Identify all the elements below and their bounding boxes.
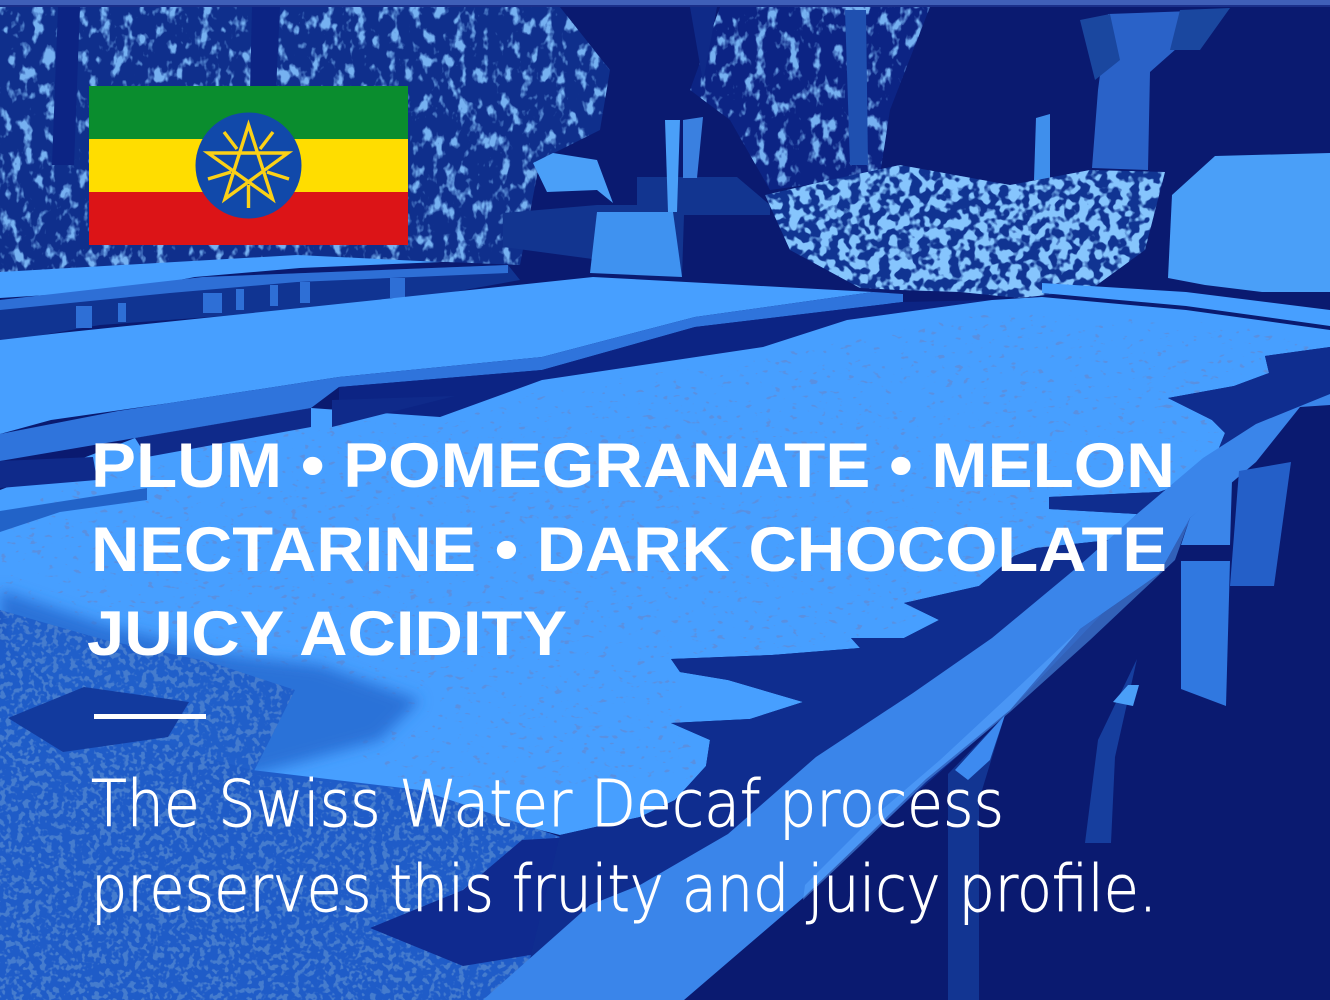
photo: far right small bed [1042, 283, 1330, 326]
photo: middle bed rail [0, 292, 903, 461]
body text [91, 768, 1157, 927]
photo: main right bed [0, 297, 1330, 835]
photo: covered cloth left [533, 153, 613, 203]
photo: dark trunk centre [690, 7, 717, 82]
flag emblem disc [196, 112, 302, 218]
photo: drying bed upper left [0, 255, 520, 342]
photo: tree trunk right [1080, 8, 1230, 170]
photo: diagonal rail [483, 394, 1330, 1000]
photo: far right post [1230, 462, 1291, 586]
photo: dark patch beside gravel [370, 832, 660, 966]
divider rule [94, 714, 206, 719]
photo: white box [590, 212, 682, 277]
photo: stacked steps behind bed [503, 177, 770, 277]
heading: flavour notes: PLUM • POMEGRANATE • MELON [91, 431, 1175, 501]
flag emblem star [208, 125, 289, 208]
photo: small lit patch [1113, 685, 1139, 706]
photo: tree beside post [683, 117, 703, 178]
photo: bush [765, 165, 1165, 298]
photo: gravel area lower left [0, 600, 570, 1000]
photo: right post [1181, 480, 1232, 706]
photo: short post [1034, 114, 1050, 180]
photo: bed specks [0, 314, 1308, 789]
photo: leg under rail [948, 715, 1005, 1000]
photo: blurred shadow stripes [0, 590, 420, 775]
photo: middle bed [0, 277, 873, 434]
photo: rail shadow bands left [0, 396, 455, 488]
photo: wedge shadow between beds [339, 300, 992, 417]
body text: The Swiss Water Decaf process [91, 768, 1004, 842]
top strip [0, 0, 1330, 7]
photo: mid stripe left [0, 488, 147, 532]
photo: forest foliage centre [690, 7, 935, 197]
photo: thin post centre [845, 10, 868, 165]
photo: tall white post [665, 120, 680, 212]
body text: preserves this fruity and juicy profile. [91, 853, 1157, 927]
flag of Ethiopia [89, 86, 408, 245]
heading: flavour notes: NECTARINE • DARK CHOCOLATE [91, 515, 1167, 585]
heading: flavour notes: JUICY ACIDITY [87, 599, 567, 669]
heading: flavour notes [87, 431, 1175, 669]
photo: rail lit edge [803, 518, 1190, 900]
photo: forest foliage left [0, 7, 620, 277]
photo: covered cloth right [1168, 153, 1330, 292]
photo: dark band between bed and rail [520, 347, 1330, 1000]
photo: lower centre post [1085, 659, 1137, 843]
